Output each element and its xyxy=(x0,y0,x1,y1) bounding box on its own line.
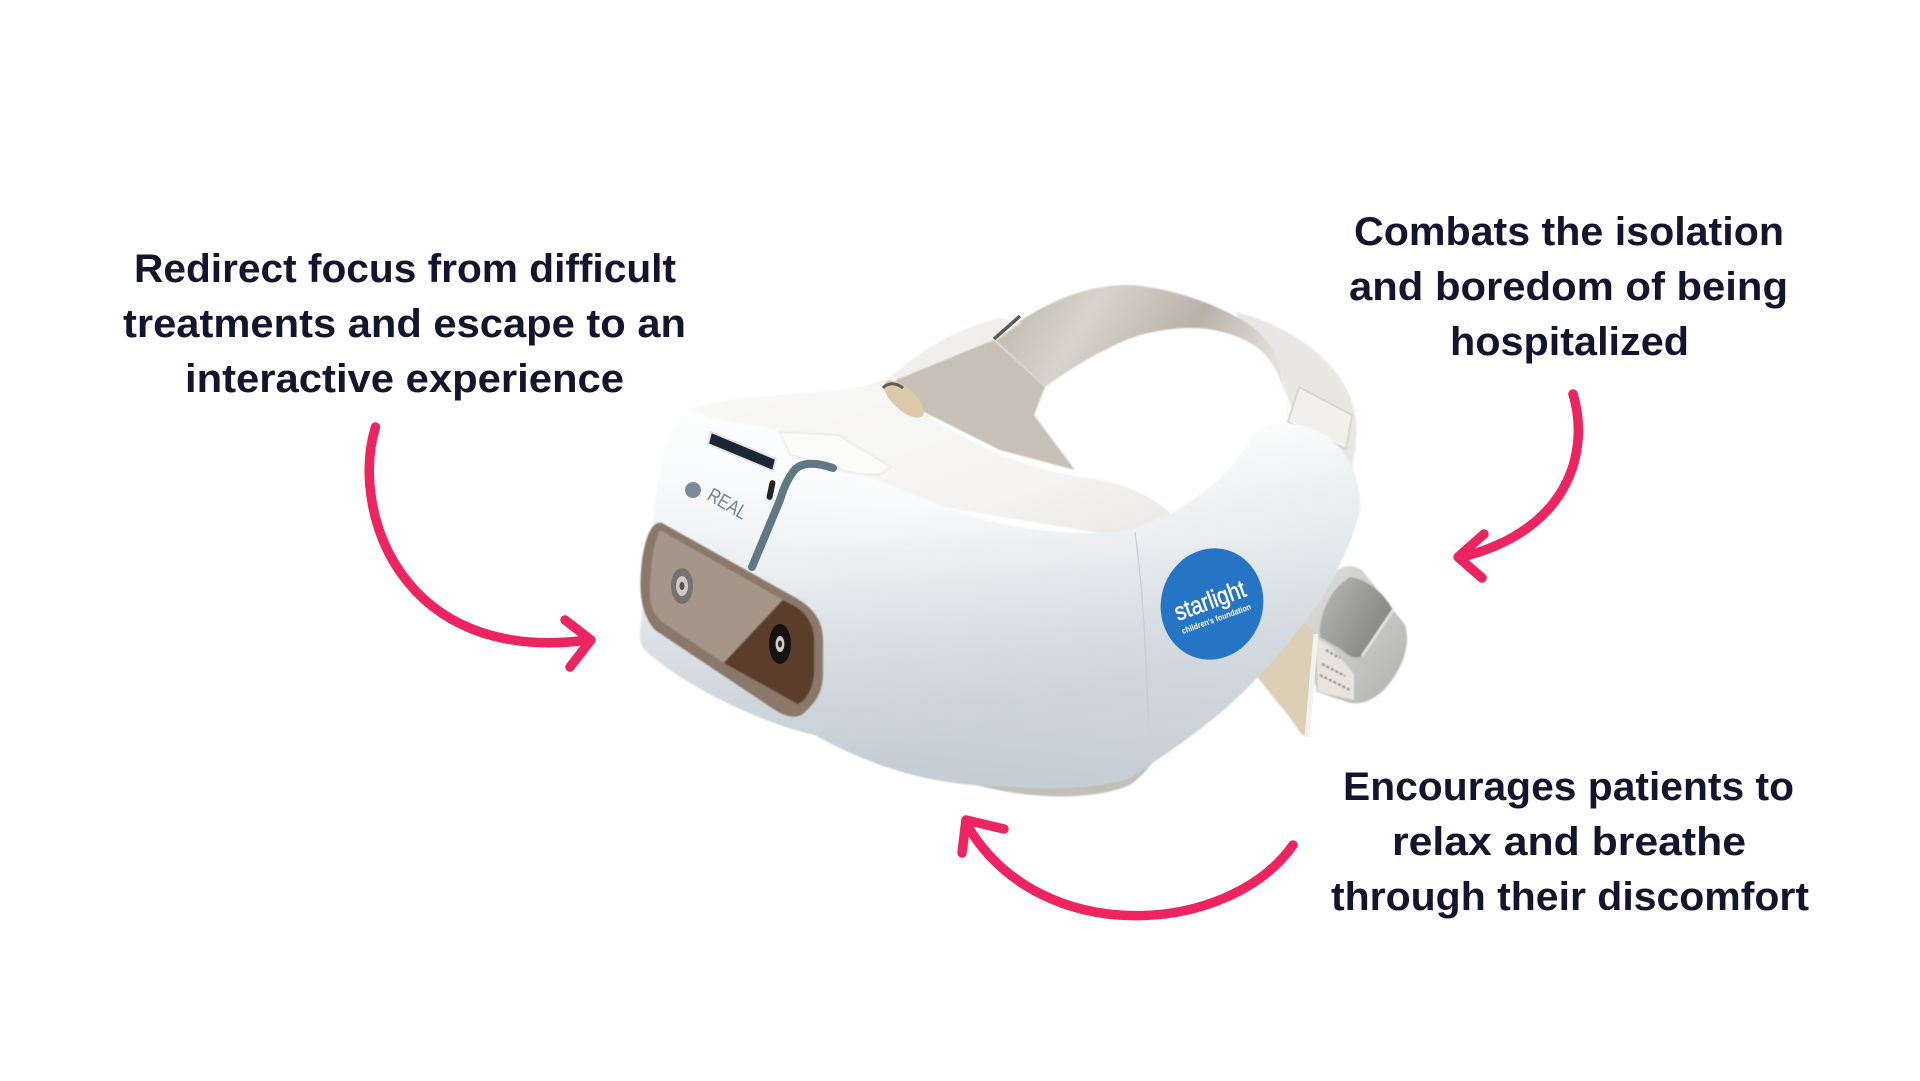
right camera xyxy=(769,624,791,664)
headset product photo xyxy=(640,285,1407,796)
REAL logo: REAL xyxy=(704,484,751,524)
text: encourages patients: through their discomfort xyxy=(1331,875,1809,919)
lens panel light glass xyxy=(650,530,783,663)
foundation name: children's foundation xyxy=(1180,602,1252,636)
text: encourages patients: Encourages patients to xyxy=(1343,765,1794,809)
beige pin xyxy=(878,374,930,424)
beige tab xyxy=(1253,618,1316,736)
starlight sticker xyxy=(1148,537,1276,671)
beige head strap xyxy=(994,285,1290,430)
text: encourages patients: relax and breathe xyxy=(1392,820,1746,864)
main white shell xyxy=(640,408,1360,788)
tab edge xyxy=(1307,634,1316,737)
shell right shading xyxy=(640,408,1360,788)
brand mark icon xyxy=(685,482,701,498)
fabric head strap xyxy=(1236,312,1357,478)
rear clip box xyxy=(1300,566,1407,703)
left camera xyxy=(671,568,693,604)
text: combats isolation: Combats the isolation xyxy=(1354,210,1784,254)
text: combats isolation xyxy=(1349,210,1788,364)
lens panel frame xyxy=(640,523,823,717)
text: encourages patients xyxy=(1331,765,1809,919)
arrow: left text to headset xyxy=(369,427,591,667)
back arm xyxy=(830,318,1022,392)
underside xyxy=(960,735,1156,796)
text: redirect focus xyxy=(123,247,686,401)
grey cable strip xyxy=(752,464,833,567)
bracket slot xyxy=(994,316,1020,339)
lens panel dark glass xyxy=(724,600,814,704)
arrow: top right text to headset xyxy=(1458,394,1578,578)
side button xyxy=(766,480,776,500)
text: redirect focus: Redirect focus from difficult xyxy=(134,247,676,291)
label marks xyxy=(1320,650,1350,690)
shell seam xyxy=(1135,532,1149,735)
text: redirect focus: treatments and escape to an xyxy=(123,302,686,346)
text: combats isolation: hospitalized xyxy=(1450,320,1689,364)
top sensor slot xyxy=(708,432,776,471)
text: combats isolation: and boredom of being xyxy=(1349,265,1788,309)
text: redirect focus: interactive experience xyxy=(185,357,624,401)
strap patch xyxy=(1288,387,1352,449)
starlight wordmark: starlight xyxy=(1170,575,1250,627)
arm bracket xyxy=(896,340,1075,470)
top surface and dome xyxy=(692,378,1172,540)
arrow: bottom right text to headset xyxy=(962,820,1293,916)
white flap xyxy=(780,432,891,475)
